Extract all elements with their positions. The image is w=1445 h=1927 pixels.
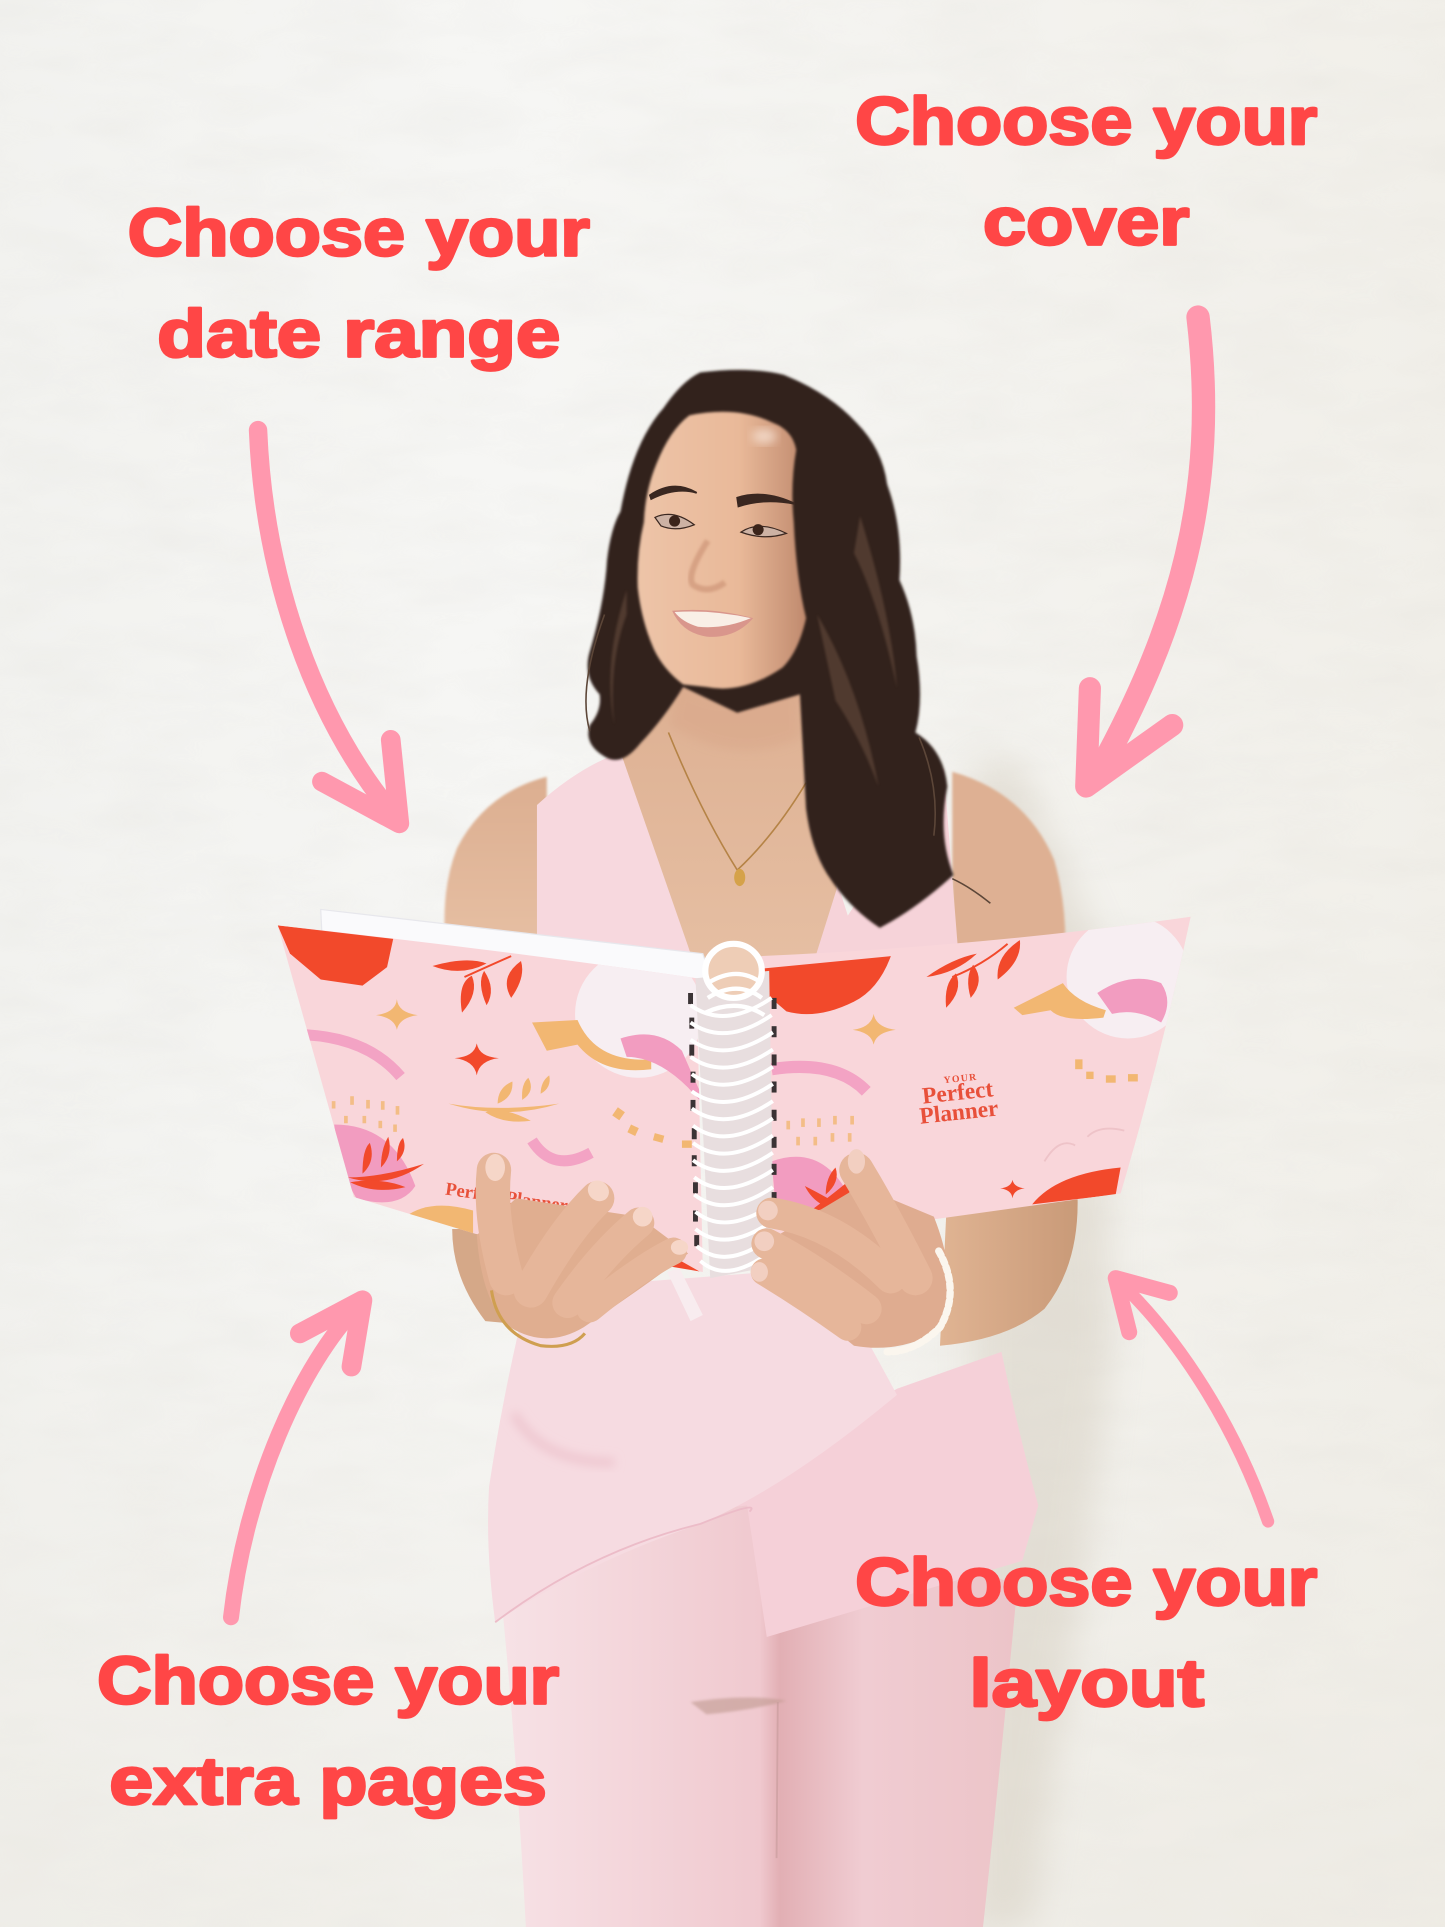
heading: choose your extra pages (97, 1644, 559, 1819)
heading: choose your layout: Choose your (855, 1546, 1317, 1620)
planner: left cover (278, 925, 710, 1272)
nose (691, 541, 725, 589)
eyes (655, 514, 694, 529)
necklace (668, 732, 806, 886)
cover brand logo: Perfect (921, 1076, 995, 1110)
arrow: to extra pages (231, 1300, 362, 1617)
arrow: to cover (1086, 317, 1204, 787)
brows (650, 487, 795, 506)
pearl bracelet (887, 1251, 950, 1352)
heading: choose your cover: cover (983, 186, 1189, 260)
heading: choose your date range (128, 197, 590, 371)
heading: choose your extra pages: extra pages (109, 1745, 547, 1819)
arrow: to layout (1116, 1278, 1268, 1521)
photo: woman holding planner (278, 370, 1191, 1927)
heading: choose your layout: layout (969, 1647, 1204, 1721)
left hand (477, 1154, 688, 1346)
shoulders and upper arms (444, 772, 1065, 971)
lower top: wrap panel (488, 1266, 897, 1622)
top straps (537, 752, 960, 983)
heading: choose your cover: Choose your (855, 85, 1317, 159)
cover brand logo: YOUR (943, 1072, 978, 1086)
heading: choose your date range: Choose your (128, 197, 590, 271)
neck and chest (614, 639, 848, 971)
cover brand logo: Planner (918, 1096, 1000, 1130)
face (638, 412, 806, 689)
planner: spiral binding (688, 944, 777, 1278)
arrow: to date range (258, 430, 399, 823)
heading: choose your extra pages: Choose your (97, 1644, 559, 1718)
mouth (672, 610, 753, 637)
heading: choose your layout (855, 1546, 1317, 1721)
right hand (751, 1149, 950, 1352)
hair (586, 370, 990, 928)
ribbon bookmark (667, 1268, 703, 1321)
cover brand text, left: Perfect Planner (444, 1179, 569, 1216)
pants (501, 1487, 1017, 1927)
cover brand logo (919, 1074, 998, 1124)
lower top: back panel (688, 1352, 1038, 1637)
planner: page block (321, 909, 713, 983)
heading: choose your cover (855, 85, 1317, 260)
planner: right cover (759, 916, 1191, 1266)
heading: choose your date range: date range (157, 297, 560, 371)
lower forearms (452, 1198, 1078, 1346)
body shadow on wall (971, 762, 1112, 1927)
